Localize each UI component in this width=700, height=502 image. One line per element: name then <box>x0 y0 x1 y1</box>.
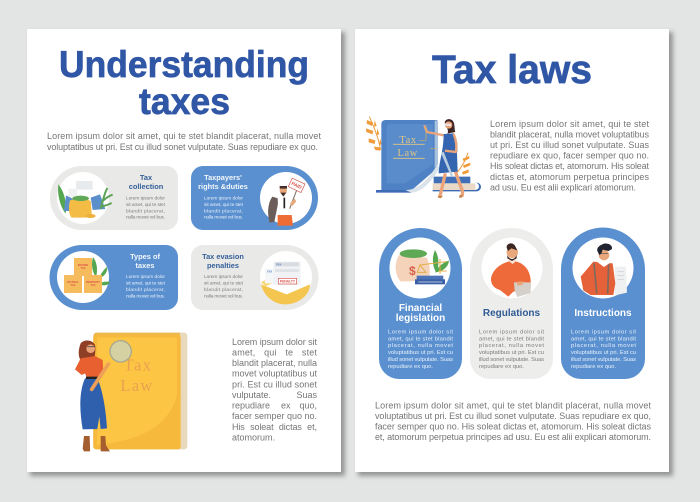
icon: penalty envelope: PENALTY <box>280 280 296 284</box>
title: Tax <box>140 173 153 182</box>
text block lower left: facer semper quo no. <box>232 411 317 421</box>
title: legislation <box>396 313 445 324</box>
title: rights &duties <box>198 182 248 191</box>
intro paragraph left: voluptatibus ut pri. Est cu illud sonet vulputate. Suas repudiare ex quo. <box>47 142 318 152</box>
title <box>198 173 248 191</box>
body text: nulla movet vol bus. <box>204 214 243 220</box>
body text: voluptatibus ut pri. Est cu <box>388 350 453 356</box>
text block lower left: Lorem ipsum dolor sit <box>232 337 317 347</box>
title: collection <box>129 182 164 191</box>
body text: Lorem ipsum dolor <box>204 196 243 202</box>
body text <box>204 196 244 220</box>
body text <box>126 274 166 300</box>
icon: penalty envelope <box>261 262 310 304</box>
title: Taxpayers' <box>204 173 242 182</box>
body text: Lorem ipsum dolor <box>126 274 165 280</box>
illustration: justice figure and blue law book: Law <box>397 148 418 159</box>
title: penalties <box>207 261 239 270</box>
icon: man with tablet <box>491 243 531 297</box>
title <box>396 303 445 324</box>
body text: blandit placerat, <box>204 287 243 293</box>
title: taxes <box>136 261 154 270</box>
intro paragraph left: Lorem ipsum dolor sit amet, qui te stet blandit placerat, nulla movet <box>47 131 321 141</box>
title: Regulations <box>483 308 541 319</box>
title <box>129 173 164 191</box>
title <box>202 252 244 270</box>
body text: blandit placerat, <box>126 208 165 214</box>
text block lower left: repudiare <box>232 401 270 411</box>
body text: repudiare ex quo. <box>388 364 433 370</box>
text block lower left <box>232 337 317 442</box>
title: Understanding taxes: Understanding <box>59 44 309 85</box>
body text: nulla movet vol bus. <box>204 294 243 300</box>
title: Financial <box>399 303 442 314</box>
text block right top: blandit placerat, nulla movet voluptatibus <box>490 130 650 140</box>
panel: left page <box>27 29 345 476</box>
body text: sit amet, qui te stet <box>126 280 166 286</box>
body text: sit amet, qui te stet <box>126 202 166 208</box>
text block right top <box>490 119 650 192</box>
card: Tax collection <box>50 166 178 230</box>
title: Instructions <box>574 308 632 319</box>
illustration: woman with magnifier and yellow book <box>75 333 187 451</box>
icon: penalty envelope: TAX <box>267 269 272 273</box>
body text: Lorem ipsum dolor <box>126 196 165 202</box>
body text <box>479 330 544 370</box>
icon: money bag and scales: $ <box>409 264 416 278</box>
text block right top: dictas et, atomorum perpetua principes <box>490 172 650 182</box>
icon: tax boxes: TAX <box>80 266 86 270</box>
card: Types of taxes <box>50 245 178 310</box>
text block right bottom: voluptatibus ut pri. Est cu illud sonet vulputate. Suas repudiare ex quo, <box>375 411 651 421</box>
body text: Lorem ipsum dolor sit <box>388 330 453 336</box>
card: Financial legislation <box>379 228 462 379</box>
title: Understanding taxes: taxes <box>139 81 230 122</box>
text block right bottom: facer semper quo no. His soleat dictas et, atomorum. His soleat dictas <box>375 422 652 432</box>
body text: blandit placerat, <box>204 208 243 214</box>
title: Understanding taxes <box>59 44 309 122</box>
body text <box>571 330 636 370</box>
body text: nulla movet vol bus. <box>126 214 165 220</box>
body text: voluptatibus ut pri. Est cu <box>571 350 636 356</box>
body text: illud sonet vulputate. Suas <box>388 357 453 363</box>
text block lower left: pri. Est cu illud sonet <box>232 379 317 389</box>
illustration: woman with magnifier and yellow book: Law <box>120 376 154 395</box>
body text: blandit placerat, <box>126 287 165 293</box>
body text: placerat, nulla movet <box>388 343 453 349</box>
card: Regulations <box>470 228 553 379</box>
illustration: woman with magnifier and yellow book: Tax <box>124 356 152 375</box>
illustration: justice figure and blue law book: Tax <box>399 135 417 146</box>
text block lower left: amet, qui te stet <box>232 348 317 358</box>
body text: amet, qui te stet blandit <box>571 336 636 342</box>
icon: tax boxes: TAX <box>70 283 76 287</box>
body text: sit amet, qui te stet <box>204 280 244 286</box>
card: Taxpayers rights and duties <box>191 166 318 230</box>
body text: Lorem ipsum dolor sit <box>571 330 636 336</box>
icon: man with document <box>581 244 627 295</box>
body text: Lorem ipsum dolor <box>204 274 243 280</box>
body text: amet, qui te stet blandit <box>388 336 453 342</box>
body text: illud sonet vulputate. Suas <box>479 357 544 363</box>
icon: tax boxes: INCOME <box>78 263 88 267</box>
body text: illud sonet vulputate. Suas <box>571 357 636 363</box>
body text <box>204 274 244 300</box>
body text: placerat, nulla movet <box>571 343 636 349</box>
text block lower left: blandit placerat, nulla <box>232 358 317 368</box>
text block right top: ad usu. Eu est alii explicari atomorum. <box>490 182 636 192</box>
body text: placerat, nulla movet <box>479 343 544 349</box>
illustration: justice figure and blue law book <box>366 117 481 198</box>
icon: tax boxes: PROPERTY <box>86 280 100 284</box>
body text: amet, qui te stet blandit <box>479 336 544 342</box>
text block lower left: vulputate. <box>232 390 271 400</box>
body text <box>126 196 166 220</box>
body text: Lorem ipsum dolor sit <box>479 330 544 336</box>
title: Tax evasion <box>202 252 244 261</box>
text block lower left: ex <box>281 401 291 411</box>
text block right bottom <box>375 400 652 442</box>
icon: penalty envelope: TAX <box>276 263 281 267</box>
card: Instructions <box>561 228 645 379</box>
icon: money bag and scales <box>396 249 449 284</box>
text block right bottom: et, atomorum perpetua principes ad usu. Eu est alii explicari atomorum. <box>375 432 651 442</box>
text block lower left: Suas <box>296 390 317 400</box>
body text: repudiare ex quo. <box>571 364 616 370</box>
card: Tax evasion penalties <box>191 245 318 310</box>
panel: right page <box>355 29 673 476</box>
text block lower left: His soleat dictas et, <box>232 422 317 432</box>
text block right top: His soleat dictas et, atomorum. His soleat <box>490 161 649 171</box>
intro paragraph left <box>47 131 321 152</box>
text block right top: repudiare ex quo, facer semper quo no. <box>490 151 649 161</box>
icon: money bag and envelopes <box>58 181 113 218</box>
icon: tax boxes: TAX <box>90 283 96 287</box>
text block lower left: movet voluptatibus ut <box>232 369 317 379</box>
body text: nulla movet vol bus. <box>126 294 165 300</box>
text block right top: ut pri. Est cu illud sonet vulputate. Suas <box>490 140 650 150</box>
title: Tax laws: Tax laws <box>432 48 592 92</box>
text block lower left: quo, <box>299 401 317 411</box>
icon: tax boxes: PAYROLL <box>67 280 79 284</box>
icon: man with sign: PAID <box>291 181 303 190</box>
text block right top: Lorem ipsum dolor sit amet, qui te stet <box>490 119 649 129</box>
title <box>130 252 160 270</box>
body text <box>388 330 453 370</box>
text block lower left: atomorum. <box>232 432 275 442</box>
body text: sit amet, qui te stet <box>204 202 244 208</box>
text block right bottom: Lorem ipsum dolor sit amet, qui te stet blandit placerat, nulla movet <box>375 400 651 410</box>
body text: voluptatibus ut pri. Est cu <box>479 350 544 356</box>
body text: repudiare ex quo. <box>479 364 524 370</box>
icon: tax boxes <box>64 257 110 293</box>
title: Types of <box>130 252 160 261</box>
